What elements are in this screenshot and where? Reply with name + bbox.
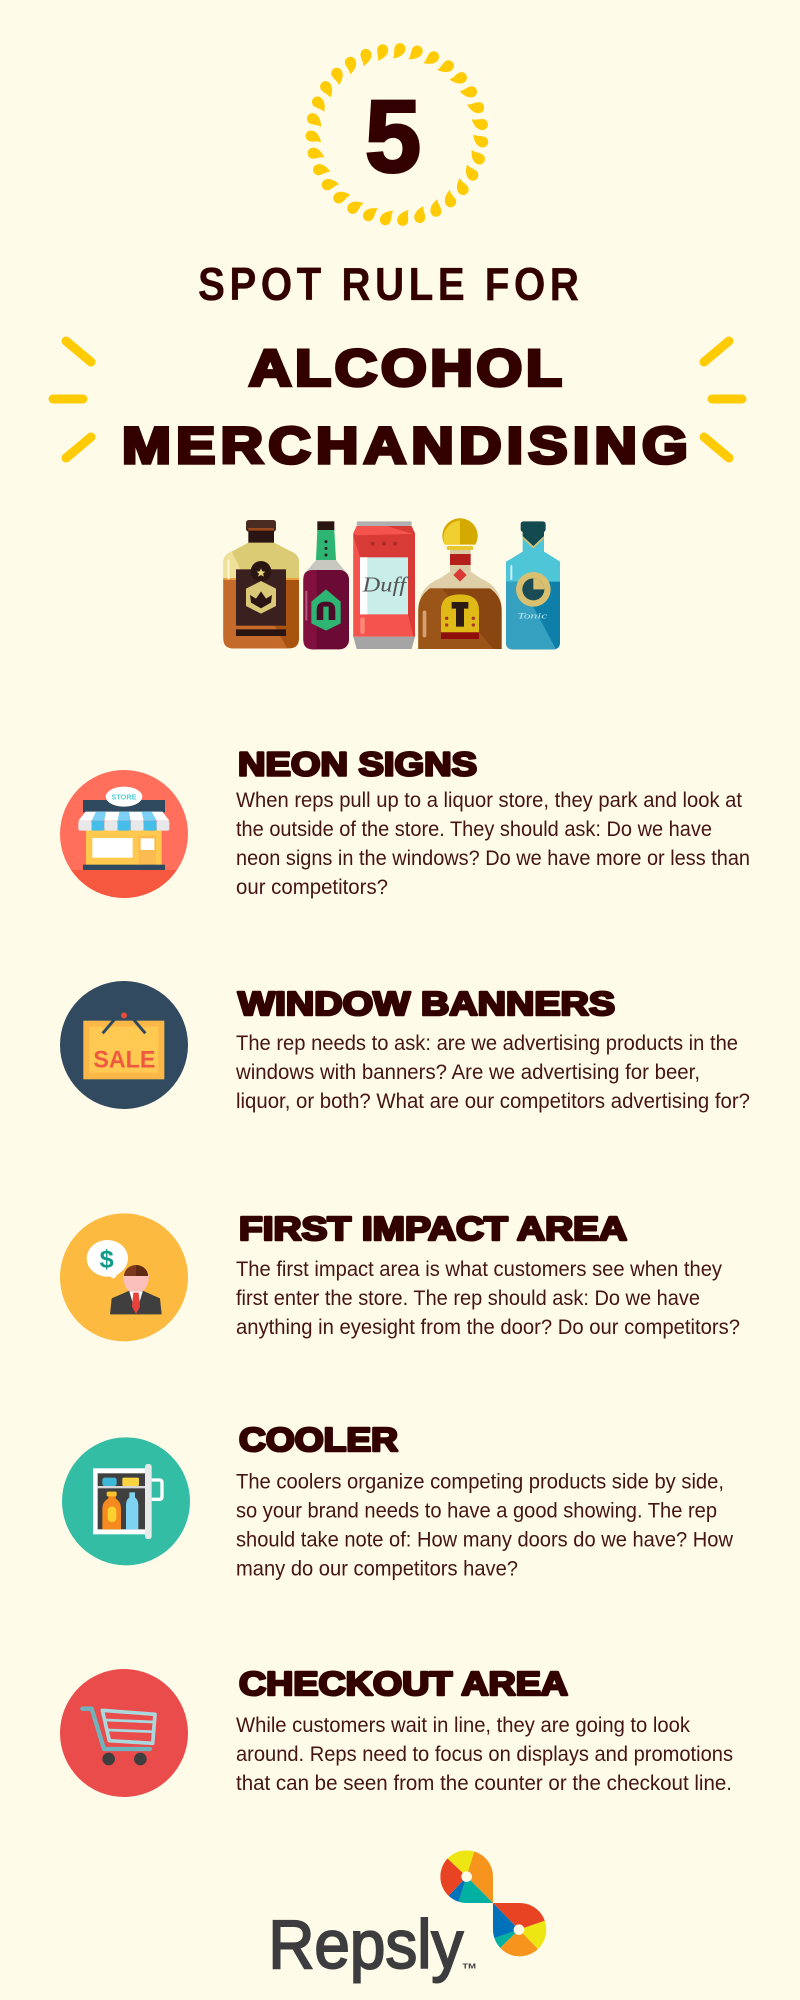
body text: should take note of: How many doors do we have? How [236,1528,734,1552]
tonic bottle [506,521,560,649]
body text: the outside of the store. They should ask: Do we have [236,818,712,841]
icon: store front [60,770,188,900]
body text: neon signs in the windows? Do we have more or less than [236,847,750,870]
logo wordmark: Repsly [268,1907,464,1983]
heading: WINDOW BANNERS [238,985,615,1022]
illustration: row of alcohol bottles [223,518,560,649]
body text: windows with banners? Are we advertising for beer, [235,1061,700,1084]
icon: shopping cart [60,1669,188,1797]
body text: The rep needs to ask: are we advertising products in the [236,1032,738,1055]
body text: anything in eyesight from the door? Do our competitors? [236,1316,740,1339]
whiskey bottle [223,520,299,648]
body text: The first impact area is what customers see when they [236,1258,722,1281]
body text [236,1258,740,1339]
wine bottle [303,521,349,649]
decorative rays right [704,341,742,458]
heading: COOLER [239,1421,398,1458]
decorative rays left [53,341,91,458]
icon: salesperson with speech bubble: $ [100,1246,114,1274]
beer can [353,521,415,649]
logo trademark: TM [462,1961,476,1970]
icon: drinks cooler [62,1437,190,1565]
icon: salesperson with speech bubble [60,1213,188,1341]
body text: While customers wait in line, they are going to look [236,1714,690,1737]
title: alcohol: ALCOHOL [249,339,562,397]
body text [236,789,750,899]
body text: so your brand needs to have a good showing. The rep [236,1500,717,1522]
logo: Repsly [268,1847,550,1983]
heading: CHECKOUT AREA [239,1665,568,1702]
body text [236,1470,734,1580]
title: number 5: 5 [365,80,421,194]
tequila bottle [418,518,502,649]
icon: store front: STORE [111,792,137,801]
body text: liquor, or both? What are our competitors advertising for? [236,1090,750,1113]
heading: FIRST IMPACT AREA [239,1210,627,1247]
body text: around. Reps need to focus on displays and promotions [236,1743,733,1766]
logo mark: upper teardrop [440,1850,493,1903]
icon: sale sign: SALE [93,1047,155,1074]
body text: that can be seen from the counter or the checkout line. [236,1772,732,1795]
heading: NEON SIGNS [238,746,477,782]
beer can: Duff [362,572,410,596]
panel: first impact area [60,1210,740,1341]
body text: our competitors? [236,876,388,899]
body text [236,1714,733,1795]
panel: checkout area [60,1665,733,1797]
body text: many do our competitors have? [236,1558,518,1580]
icon: sale sign [60,981,188,1109]
panel: cooler [62,1421,734,1580]
body text: The coolers organize competing products side by side, [236,1470,724,1494]
body text: When reps pull up to a liquor store, they park and look at [236,789,742,812]
title: merchandising: MERCHANDISING [122,417,688,474]
body text: first enter the store. The rep should ask: Do we have [236,1287,700,1310]
body text [235,1032,750,1113]
title: spot rule for: SPOT RULE FOR [198,260,579,311]
tonic bottle: Tonic [517,611,548,621]
icon: number badge wreath [305,43,489,226]
panel: window banners [60,981,750,1113]
logo mark: lower teardrop [493,1903,546,1956]
panel: neon signs [60,746,750,900]
